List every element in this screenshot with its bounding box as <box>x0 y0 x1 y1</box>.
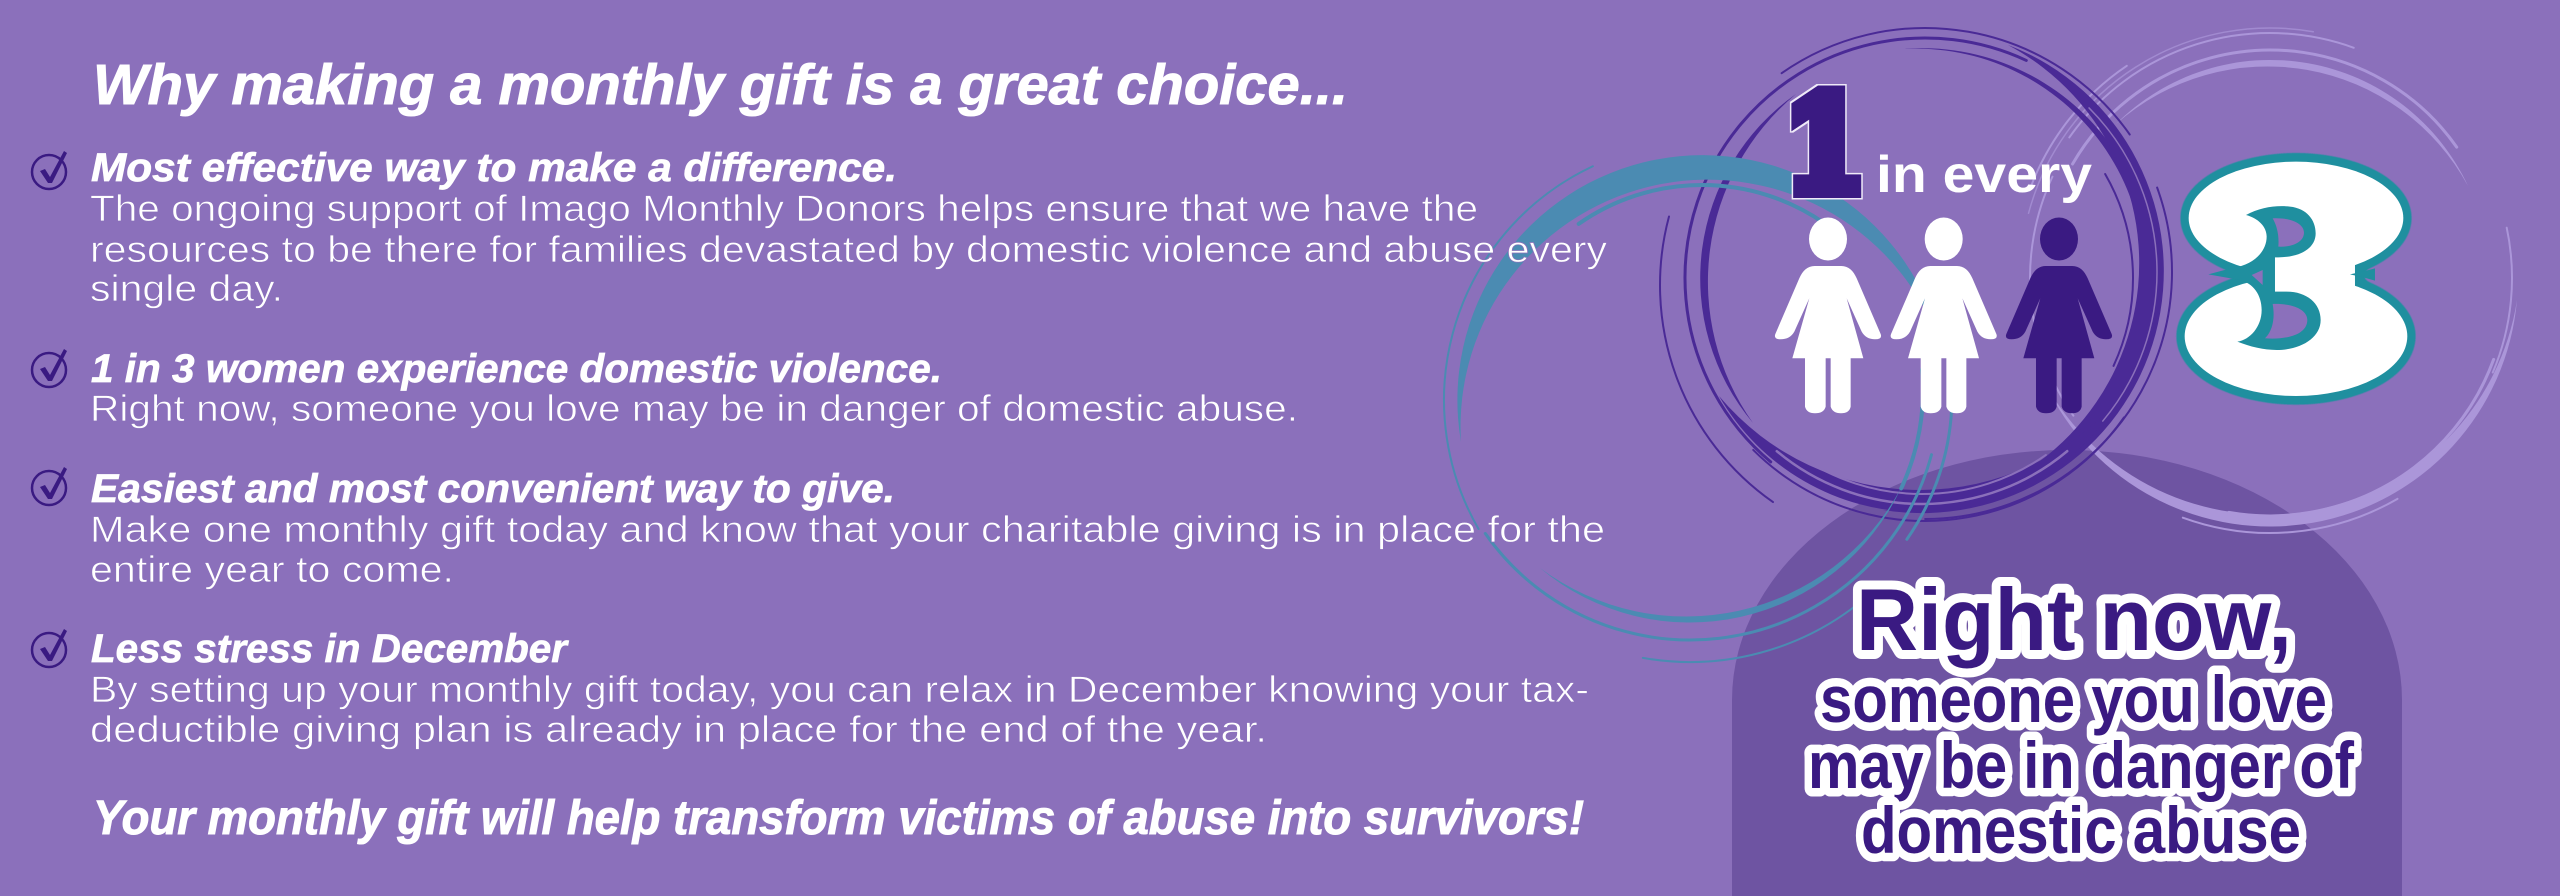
arch panel <box>1732 450 2402 896</box>
item 3: easiest <box>32 467 1605 590</box>
title: Why making a monthly gift is a great choice... <box>93 53 1348 117</box>
callout: right now: may be in danger of <box>1808 728 2355 802</box>
body 3 <box>90 509 1605 590</box>
teal brush ring <box>1307 7 2073 773</box>
icon: check 1 <box>32 151 67 189</box>
numeral 3: 3 <box>2218 167 2382 405</box>
heading 4: Less stress in December <box>91 627 569 671</box>
numeral 1: 1 <box>1784 69 1866 222</box>
body 2: Right now, someone you love may be in danger of domestic abuse. <box>90 388 1298 429</box>
icon: check 2 <box>32 349 67 387</box>
heading 1: Most effective way to make a difference. <box>91 146 897 190</box>
body 1: single day. <box>90 268 283 309</box>
heading 2: 1 in 3 women experience domestic violence. <box>91 347 942 391</box>
numeral 3 inner detail <box>2208 206 2375 350</box>
body 3: entire year to come. <box>90 549 454 590</box>
callout: right now: Right now, <box>1856 570 2292 669</box>
icon: woman 1 <box>1775 218 1881 413</box>
heading 3: Easiest and most convenient way to give. <box>91 467 895 511</box>
icon: woman 3 highlighted <box>2006 218 2112 413</box>
callout: right now: someone you love <box>1820 662 2327 736</box>
body 3: Make one monthly gift today and know that your charitable giving is in place for the <box>90 509 1605 550</box>
closing statement: Your monthly gift will help transform victims of abuse into survivors! <box>93 792 1584 845</box>
icon: check 3 <box>32 467 67 505</box>
callout: right now: domestic abuse <box>1861 793 2301 867</box>
item 2: 1 in 3 women <box>32 347 1298 429</box>
body 1: resources to be there for families devastated by domestic violence and abuse every <box>90 229 1608 270</box>
in every label: in every <box>1876 146 2092 204</box>
body 4: deductible giving plan is already in place for the end of the year. <box>90 709 1267 750</box>
icon: woman 2 <box>1891 218 1997 413</box>
light brush ring <box>1922 0 2560 626</box>
callout: right now <box>1808 570 2355 867</box>
body 4 <box>90 669 1589 750</box>
item 1: most effective <box>32 146 1608 309</box>
body 1 <box>90 188 1608 309</box>
body 4: By setting up your monthly gift today, you can relax in December knowing your tax- <box>90 669 1589 710</box>
body 1: The ongoing support of Imago Monthly Donors helps ensure that we have the <box>90 188 1478 229</box>
icon: check 4 <box>32 629 67 667</box>
dark purple brush ring <box>1556 0 2294 654</box>
item 4: december <box>32 627 1589 750</box>
